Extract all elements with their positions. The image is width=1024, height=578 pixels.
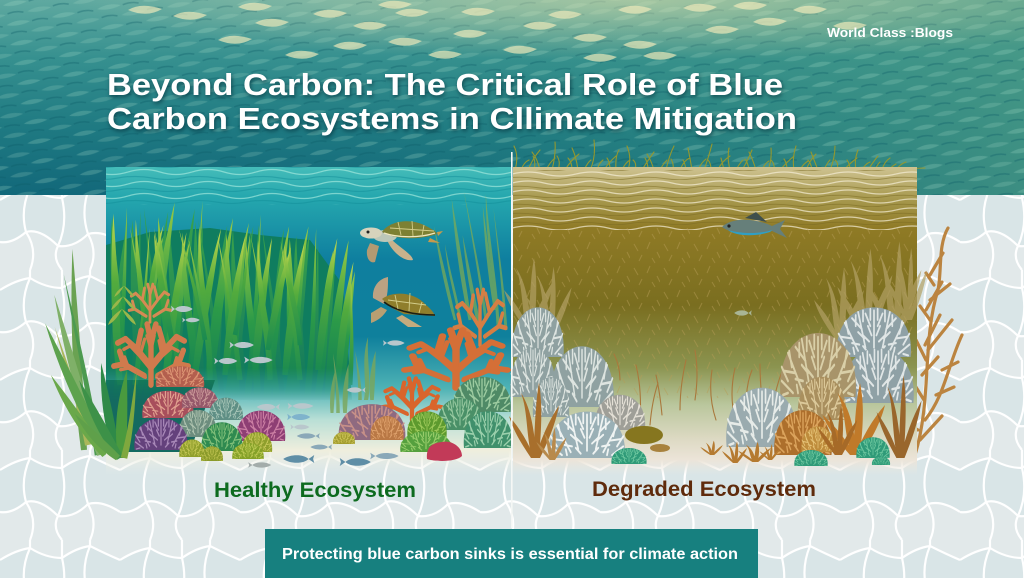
title: Carbon Ecosystems in Cllimate Mitigation [107, 101, 797, 136]
title: Beyond Carbon: The Critical Role of Blue [107, 67, 783, 102]
green algae patches [611, 437, 890, 466]
center divider [511, 152, 513, 528]
bleached coral right [726, 307, 914, 455]
brown kelp [509, 375, 922, 460]
seagrass meadow [101, 201, 360, 401]
title [107, 67, 797, 136]
small fish [734, 310, 752, 316]
label: degraded ecosystem: Degraded Ecosystem [592, 478, 816, 501]
right coral reef [333, 290, 512, 452]
center seaweed [330, 337, 376, 413]
panel: degraded ecosystem [504, 167, 927, 475]
right overflow kelp [904, 228, 962, 455]
tan tufts [625, 426, 780, 463]
thin dead grass [614, 350, 785, 425]
right background seagrass [430, 190, 507, 330]
dark seagrass base behind left reef [106, 380, 215, 452]
yellow-green seagrass sprig [108, 286, 136, 325]
bleached coral left [510, 307, 645, 458]
background dried grass [504, 241, 927, 340]
left orange coral [114, 284, 188, 385]
left overflow seagrass [35, 249, 111, 458]
bottom banner [265, 529, 758, 578]
left reef clumps [134, 366, 285, 461]
brand logo text: World Class :Blogs [827, 26, 953, 40]
degraded fish [722, 212, 787, 238]
turtle 1 [360, 221, 443, 262]
banner text: Protecting blue carbon sinks is essential for climate action [282, 546, 738, 563]
red rock coral [427, 442, 462, 461]
background: rippled ocean surface [0, 0, 1024, 195]
label: healthy ecosystem: Healthy Ecosystem [214, 479, 416, 502]
panel: healthy ecosystem [101, 167, 512, 475]
turtle 2 [371, 277, 435, 327]
background: caustic sand floor [0, 190, 1024, 578]
front left seagrass clump [69, 363, 148, 461]
fish school [171, 306, 405, 468]
degraded surface seagrass [514, 140, 925, 170]
